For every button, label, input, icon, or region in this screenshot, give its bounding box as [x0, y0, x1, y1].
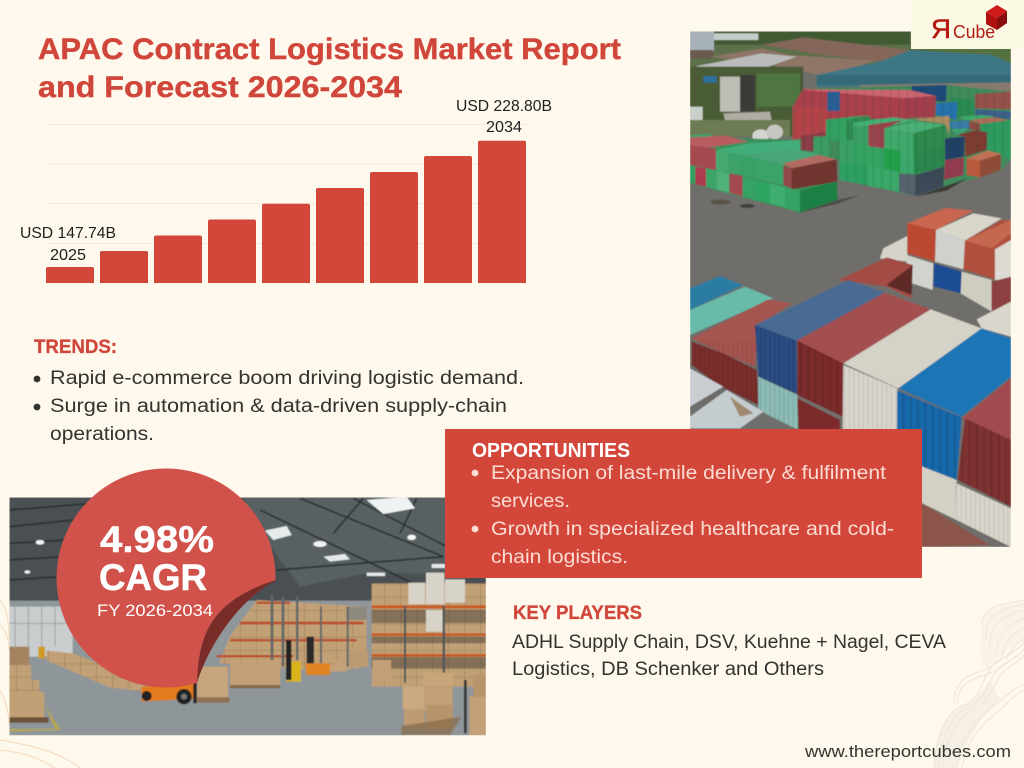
panel: key players	[512, 603, 946, 680]
container stacks: mid right	[838, 208, 1011, 312]
title	[38, 33, 621, 104]
logo	[911, 0, 1024, 49]
warehouse pallets: right foreground	[373, 660, 486, 735]
key players list: ADHL Supply Chain, DSV, Kuehne + Nagel, CEVA	[512, 632, 946, 653]
warehouse racks: right	[372, 573, 486, 687]
label: 2034 value	[456, 98, 552, 136]
warehouse pallets: left aisle	[9, 647, 143, 732]
logo cube icon	[986, 5, 1007, 30]
label: 2025 value: USD 147.74B	[20, 225, 116, 242]
label: 2034 value: 2034	[486, 119, 522, 136]
CAGR value: 4.98%	[100, 519, 214, 560]
logo text: Я	[931, 14, 951, 44]
label: 2034 value: USD 228.80B	[456, 98, 552, 115]
CAGR word: CAGR	[99, 557, 207, 598]
label: 2025 value: 2025	[50, 247, 86, 264]
trends heading: TRENDS:	[34, 337, 117, 358]
container stacks: back	[793, 85, 1011, 196]
key players list: Logistics, DB Schenker and Others	[512, 659, 824, 680]
logo: Cube	[953, 22, 995, 42]
sticker circle	[57, 468, 276, 687]
container stacks: backing masses	[690, 85, 1011, 213]
bar chart	[20, 98, 552, 283]
opportunities list: chain logistics.	[491, 547, 628, 568]
trends list: Surge in automation & data-driven supply-chain	[50, 396, 507, 417]
opportunities list	[472, 463, 894, 568]
decorative contours: bottom left	[0, 600, 80, 768]
opportunities list: Growth in specialized healthcare and cold-	[491, 519, 894, 540]
key players heading: KEY PLAYERS	[513, 603, 642, 624]
container stacks: foreground	[690, 276, 1011, 547]
opportunities heading: OPPORTUNITIES	[472, 440, 630, 462]
callout: CAGR peel sticker	[57, 468, 276, 687]
forklift and pallets: centre	[142, 637, 368, 704]
CAGR period: FY 2026-2034	[97, 601, 213, 620]
key players list	[512, 632, 946, 680]
opportunities list: services.	[491, 491, 570, 512]
panel: opportunities	[445, 429, 922, 578]
trends list: operations.	[50, 424, 154, 445]
photo: container yard	[690, 31, 1011, 547]
panel: trends	[34, 337, 524, 445]
decorative wave: bottom right	[934, 600, 1024, 768]
title: and Forecast 2026-2034	[38, 71, 402, 104]
warehouse floor	[9, 653, 486, 735]
label: 2025 value	[20, 225, 116, 264]
trends list	[34, 368, 524, 445]
warehouse racks: centre	[217, 595, 367, 672]
website: www.thereportcubes.com	[804, 742, 1011, 761]
trends list: Rapid e-commerce boom driving logistic demand.	[50, 368, 524, 389]
peel fold	[197, 580, 276, 683]
container stacks: left front	[690, 134, 838, 213]
opportunities list: Expansion of last-mile delivery & fulfilment	[491, 463, 887, 484]
title: APAC Contract Logistics Market Report	[38, 33, 621, 66]
photo: warehouse	[9, 497, 486, 735]
